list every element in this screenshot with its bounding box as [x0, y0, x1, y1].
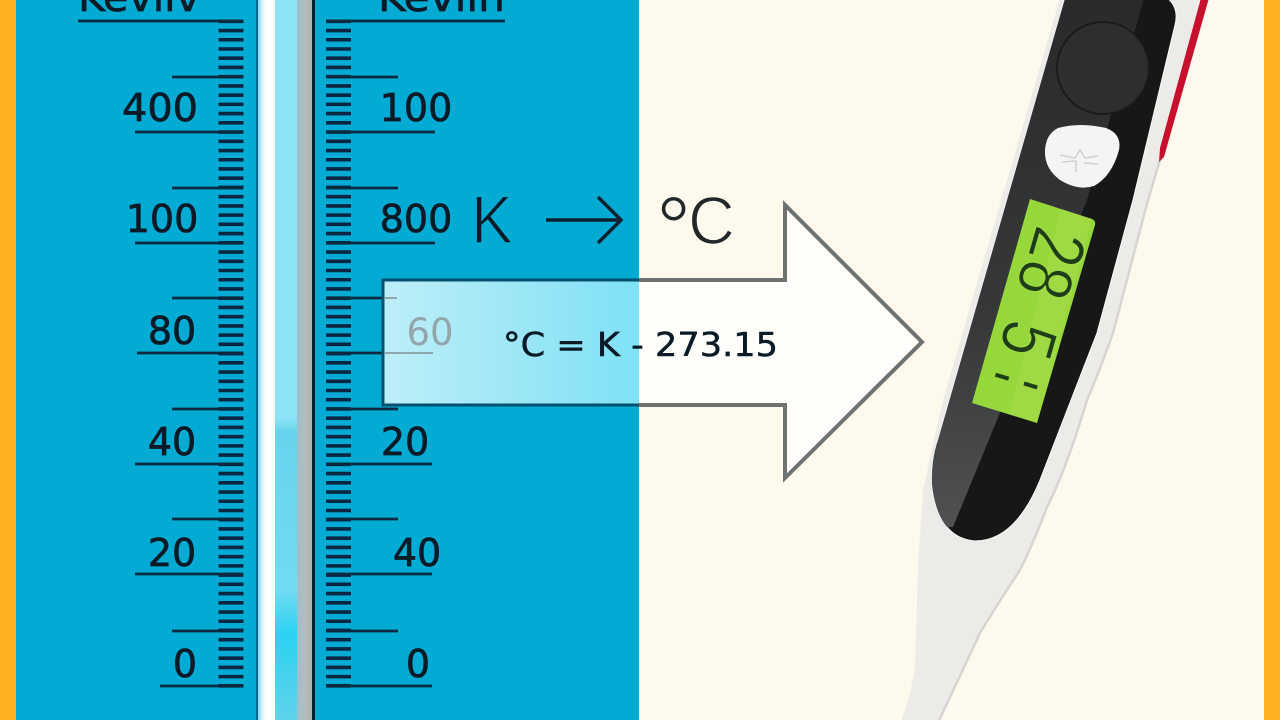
left orange border — [0, 0, 16, 720]
right Kelvin scale — [326, 0, 505, 688]
left scale numbers: 40 — [148, 420, 196, 464]
right scale numbers: 0 — [406, 642, 430, 686]
LCD digits: 5 — [974, 308, 1073, 369]
panel: blue Kelvin panel — [16, 0, 639, 720]
white thermometer body — [900, 0, 1210, 720]
arrow fill on blue — [383, 280, 639, 405]
letter K: K — [471, 182, 513, 258]
left scale numbers: 80 — [148, 309, 196, 353]
LCD digits: 2 — [1003, 215, 1102, 276]
right scale numbers: 20 — [381, 420, 429, 464]
body edge shading — [937, 160, 1160, 720]
left Kelvin scale — [78, 0, 243, 688]
glossy highlight on face — [932, 0, 1144, 527]
small arrow — [546, 197, 621, 243]
left scale numbers: 20 — [148, 531, 196, 575]
faded ticks behind arrow — [385, 298, 433, 353]
round button — [1057, 22, 1149, 114]
left minor ticks — [218, 20, 244, 688]
LCD digits: - - — [989, 353, 1046, 404]
degree sign: ° — [656, 178, 691, 277]
left scale numbers: 0 — [173, 642, 197, 686]
formula: °C = K - 273.15 — [503, 325, 778, 364]
K to degrees C heading — [471, 178, 735, 277]
black face — [932, 0, 1176, 541]
left scale numbers — [122, 86, 198, 686]
digital thermometer — [900, 0, 1210, 720]
arrow shape on cream — [639, 205, 922, 478]
left major ticks — [78, 21, 243, 686]
left scale numbers: 100 — [126, 197, 198, 241]
arrow outline on blue — [383, 280, 639, 405]
glass tube between the scales — [256, 0, 315, 720]
faded number 60 behind arrow: 60 — [406, 311, 454, 354]
red stripe — [1159, 0, 1209, 162]
white patch joining arrow halves — [636, 282, 656, 403]
right scale numbers: 800 — [380, 197, 452, 241]
right scale numbers: 100 — [380, 86, 452, 130]
letter C: C — [688, 183, 735, 259]
LCD digits — [974, 215, 1102, 404]
left scale numbers: 400 — [122, 86, 198, 130]
LCD digits: 8 — [991, 248, 1090, 309]
white button — [1045, 125, 1119, 188]
large conversion arrow — [383, 205, 922, 478]
right scale numbers — [380, 86, 452, 686]
right scale numbers: 40 — [393, 531, 441, 575]
right major ticks — [326, 21, 505, 686]
LCD screen — [972, 199, 1102, 423]
right minor ticks — [326, 20, 351, 688]
right orange border — [1264, 0, 1280, 720]
